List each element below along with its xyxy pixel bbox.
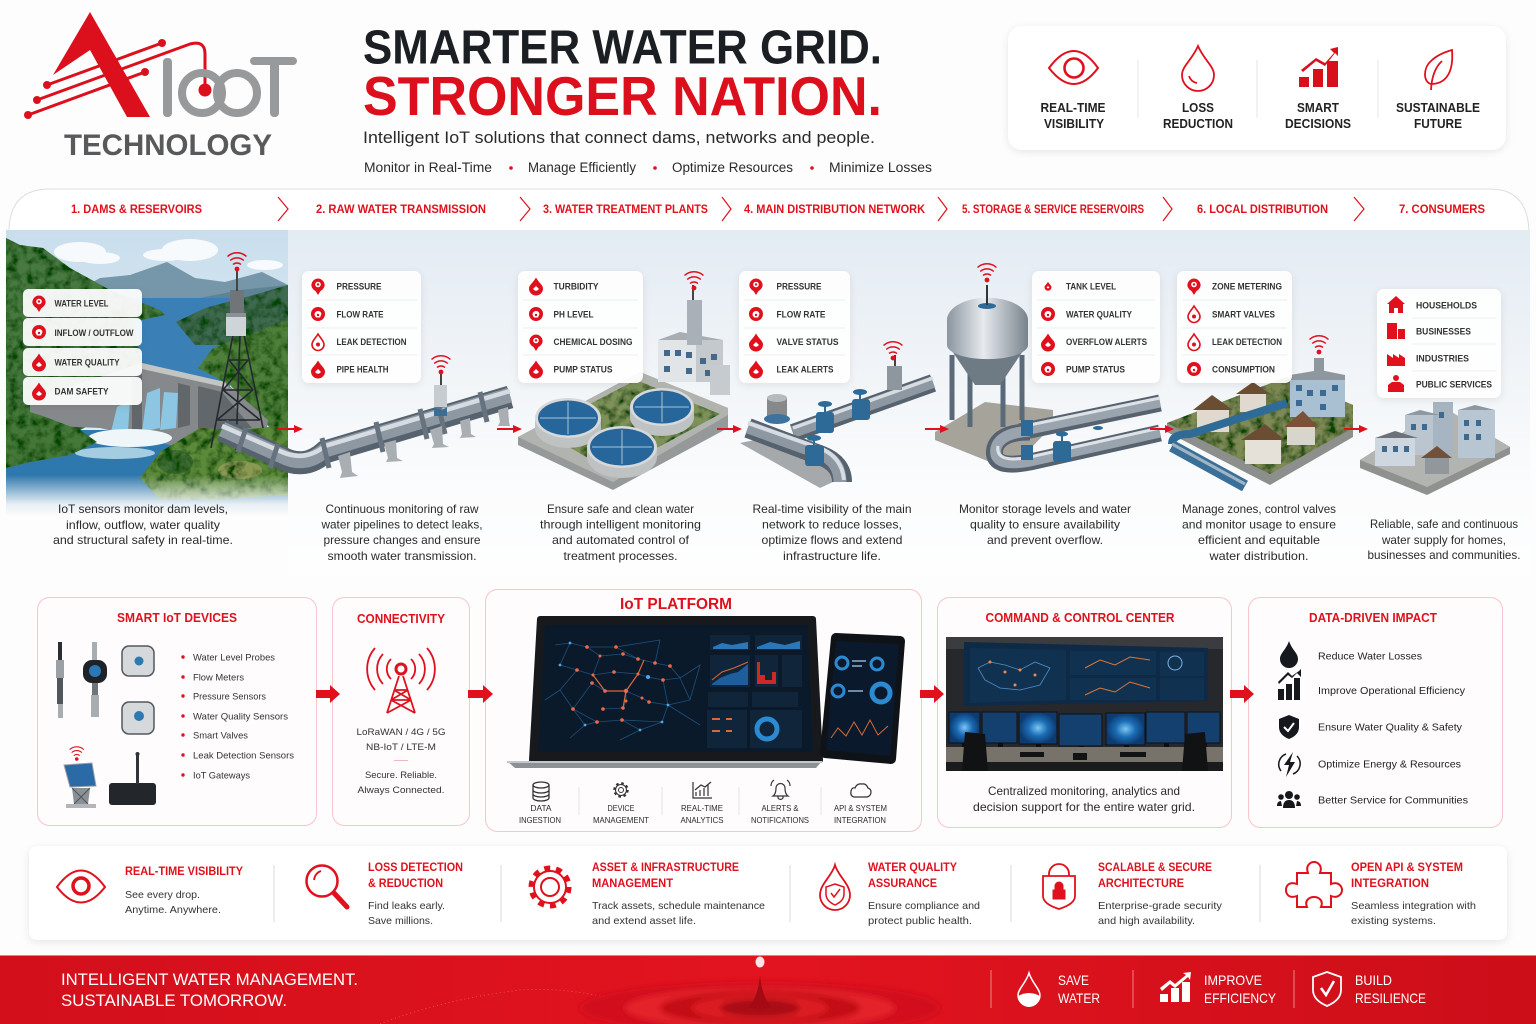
panel: water journey background	[9, 189, 1530, 575]
capability: asset management: ASSET & INFRASTRUCTURE	[592, 860, 739, 874]
capability: open API	[1286, 860, 1476, 927]
benefit label: real-time visibility: REAL-TIME	[1040, 101, 1106, 115]
connectivity protocols	[356, 727, 446, 753]
icon: eye	[1049, 51, 1098, 84]
capability: open API: Seamless integration with	[1351, 900, 1476, 912]
sensor card: local distribution: ZONE METERING	[1212, 282, 1282, 292]
icon: public services	[1388, 375, 1404, 392]
stage headers: 4. MAIN DISTRIBUTION NETWORK	[744, 204, 926, 216]
title: STRONGER NATION.	[363, 65, 882, 127]
sensor card: dam	[23, 289, 142, 405]
sensor card: local distribution	[1177, 271, 1292, 383]
benefit label: smart decisions: SMART	[1297, 101, 1339, 115]
heading: DATA-DRIVEN IMPACT	[1309, 610, 1437, 625]
illustration: main distribution pipes	[740, 342, 933, 488]
sensor card: treatment: CHEMICAL DOSING	[554, 337, 633, 347]
benefit label: loss reduction: REDUCTION	[1163, 117, 1233, 131]
laptop	[507, 619, 822, 768]
sensor card: consumers: BUSINESSES	[1416, 326, 1471, 336]
stage headers: 6. LOCAL DISTRIBUTION	[1197, 204, 1328, 216]
stage description: storage: Monitor storage levels and water	[959, 502, 1131, 516]
impact: efficiency: Improve Operational Efficiency	[1318, 686, 1466, 697]
illustration: local distribution neighbourhood	[1167, 336, 1353, 486]
panel: capabilities bar	[29, 846, 1507, 940]
connectivity note: Secure. Reliable.	[365, 770, 437, 781]
benefit label: real-time visibility	[1040, 101, 1106, 131]
caption	[973, 784, 1195, 814]
sensor card: main network: LEAK ALERTS	[776, 364, 834, 374]
icon: factory	[1387, 354, 1405, 366]
arrow: platform to command center	[920, 685, 944, 703]
sensor card: consumers: INDUSTRIES	[1416, 354, 1469, 364]
benefit label: smart decisions	[1285, 101, 1351, 131]
capability: loss detection: Save millions.	[368, 915, 433, 927]
feature: real-time analytics	[680, 782, 724, 825]
stage description: local distribution: Manage zones, control valves	[1182, 502, 1336, 516]
feature: alerts and notifications	[751, 780, 809, 825]
sensor card: storage: TANK LEVEL	[1066, 282, 1117, 292]
impact: water losses: Reduce Water Losses	[1318, 652, 1422, 662]
impact: water losses	[1280, 641, 1422, 668]
heading: COMMAND & CONTROL CENTER	[986, 610, 1175, 625]
illustration: storage reservoir	[935, 264, 1160, 470]
sensor card: dam: WATER QUALITY	[54, 358, 120, 368]
capability: real-time visibility: Anytime. Anywhere.	[125, 904, 221, 916]
feature: data ingestion: DATA	[530, 803, 552, 813]
stage description: dams	[53, 502, 233, 547]
logo: AIoT Technology	[24, 12, 297, 162]
capability: secure architecture: Enterprise-grade security	[1098, 900, 1223, 912]
sensor card: storage: OVERFLOW ALERTS	[1066, 337, 1147, 347]
stage description: dams: IoT sensors monitor dam levels,	[58, 502, 228, 516]
stage description: main network: Real-time visibility of the main	[752, 502, 912, 516]
feature: API and system integration: INTEGRATION	[834, 815, 886, 825]
sensor card: storage	[1032, 271, 1160, 383]
device list: Pressure Sensors	[193, 692, 266, 702]
caption: Centralized monitoring, analytics and	[988, 784, 1180, 798]
capability: water quality: WATER QUALITY	[868, 860, 957, 874]
sensor card: main network: FLOW RATE	[776, 310, 826, 320]
impact: energy	[1279, 752, 1461, 777]
sensor tower	[211, 253, 263, 450]
stage chevrons	[278, 197, 1364, 221]
capability: open API: existing systems.	[1351, 915, 1436, 927]
footer benefit: build resilience: RESILIENCE	[1355, 990, 1426, 1006]
sensor card: treatment: PUMP STATUS	[554, 364, 613, 374]
capability: loss detection: & REDUCTION	[368, 876, 443, 890]
device list	[181, 652, 294, 782]
value tagline: Manage Efficiently	[528, 160, 636, 175]
device list: Water Quality Sensors	[193, 712, 288, 722]
network map	[545, 640, 700, 740]
houses	[1193, 382, 1318, 464]
footer benefit: build resilience	[1313, 972, 1426, 1006]
feature: API and system integration: API & SYSTEM	[834, 803, 887, 813]
capability: secure architecture: SCALABLE & SECURE	[1098, 860, 1212, 874]
stage description: consumers: water supply for homes,	[1381, 533, 1506, 547]
stage description: treatment: and automated control of	[552, 533, 690, 547]
icon: leaf	[1425, 50, 1452, 90]
capability: loss detection: LOSS DETECTION	[368, 860, 463, 874]
sensor card: dam: WATER LEVEL	[54, 298, 109, 308]
sensor card: raw water: FLOW RATE	[336, 310, 384, 320]
footer benefit: save water: SAVE	[1058, 972, 1089, 988]
heading: CONNECTIVITY	[357, 611, 445, 626]
benefit label: sustainable future: SUSTAINABLE	[1396, 101, 1480, 115]
sensor card: storage: PUMP STATUS	[1066, 364, 1125, 374]
impact: communities: Better Service for Communities	[1318, 796, 1468, 806]
capability: loss detection: Find leaks early.	[368, 900, 445, 912]
stage headers: 5. STORAGE & SERVICE RESERVOIRS	[962, 204, 1144, 216]
benefit label: loss reduction: LOSS	[1182, 101, 1214, 115]
panel: top benefits	[1008, 26, 1506, 150]
stage headers: 2. RAW WATER TRANSMISSION	[316, 204, 486, 216]
stage description: consumers	[1368, 517, 1520, 562]
device list: Smart Valves	[193, 730, 248, 742]
sensor card: raw water: PRESSURE	[336, 282, 382, 292]
icon: growth chart	[1299, 47, 1338, 87]
stage description: storage: and prevent overflow.	[987, 533, 1103, 547]
stage headers: 7. CONSUMERS	[1399, 204, 1485, 216]
value tagline: Minimize Losses	[829, 160, 932, 175]
stage description: treatment: treatment processes.	[564, 549, 678, 563]
capability: secure architecture	[1043, 860, 1223, 927]
sensor card: dam: INFLOW / OUTFLOW	[54, 328, 134, 338]
capability: water quality: ASSURANCE	[868, 876, 937, 890]
sensor card: main network: PRESSURE	[776, 282, 822, 292]
sensor card: storage: WATER QUALITY	[1066, 310, 1132, 320]
footer tagline: INTELLIGENT WATER MANAGEMENT.	[61, 970, 358, 989]
sensor card: local distribution: CONSUMPTION	[1212, 364, 1275, 374]
blue valves	[805, 389, 870, 466]
stage description: dams: and structural safety in real-time.	[53, 533, 233, 547]
device list: Water Level Probes	[193, 652, 275, 664]
capability: water quality: protect public health.	[868, 915, 972, 927]
footer banner	[0, 955, 1536, 1024]
title	[363, 22, 882, 127]
stage description: local distribution: water distribution.	[1208, 549, 1308, 563]
sensor card: raw water	[302, 271, 421, 383]
stage description: storage	[959, 502, 1131, 547]
capability: asset management	[531, 860, 765, 927]
impact: quality and safety: Ensure Water Quality & Safety	[1318, 722, 1463, 734]
impact: communities	[1277, 791, 1468, 808]
device: sensor boxes	[122, 646, 154, 734]
storage pipes	[994, 398, 1160, 464]
sensor card: consumers	[1377, 289, 1501, 398]
capability: loss detection	[306, 860, 463, 927]
capability: secure architecture: ARCHITECTURE	[1098, 876, 1184, 890]
capability: real-time visibility: REAL-TIME VISIBILITY	[125, 864, 243, 878]
benefit label: loss reduction	[1163, 101, 1233, 131]
stage description: main network: infrastructure life.	[783, 549, 881, 563]
stage description: treatment	[540, 502, 701, 563]
stage description: local distribution: and monitor usage to ensure	[1182, 518, 1336, 532]
capability: asset management: Track assets, schedule maintenance	[592, 900, 765, 912]
connectivity note: Always Connected.	[358, 785, 444, 796]
caption: decision support for the entire water grid.	[973, 800, 1195, 814]
pipe supports	[338, 407, 510, 478]
title: SMARTER WATER GRID.	[363, 22, 882, 74]
logo: AIoT Technology: TECHNOLOGY	[64, 129, 272, 162]
stage headers: 1. DAMS & RESERVOIRS	[71, 204, 202, 216]
footer tagline: SUSTAINABLE TOMORROW.	[61, 991, 287, 1010]
stage description: raw water: Continuous monitoring of raw	[326, 502, 479, 516]
sensor card: main network	[739, 271, 850, 383]
panel: command and control center	[938, 598, 1232, 828]
panel: data-driven impact	[1248, 598, 1502, 828]
feature: data ingestion: INGESTION	[519, 815, 561, 825]
capability: secure architecture: and high availability.	[1098, 915, 1195, 927]
sensor card: treatment: PH LEVEL	[554, 310, 594, 320]
benefit label: sustainable future	[1396, 101, 1480, 131]
heading: IoT PLATFORM	[620, 596, 732, 613]
illustration: pipeline sensor	[432, 356, 450, 416]
heading: SMART IoT DEVICES	[117, 610, 237, 625]
feature: API and system integration	[834, 784, 887, 825]
capability: water quality	[820, 860, 980, 927]
stage description: consumers: businesses and communities.	[1368, 548, 1520, 562]
arrow: devices to connectivity	[316, 685, 340, 703]
stage description: raw water: water pipelines to detect leaks,	[321, 518, 482, 532]
panel: IoT platform	[486, 590, 922, 832]
stage description: local distribution: efficient and equitable	[1198, 533, 1320, 547]
icon: drop	[1182, 46, 1214, 91]
panel: smart IoT devices	[38, 598, 316, 826]
value tagline: Optimize Resources	[672, 160, 793, 175]
device: gateway	[109, 752, 156, 805]
benefit label: smart decisions: DECISIONS	[1285, 117, 1351, 131]
illustration: dam and reservoir	[0, 230, 510, 520]
sensor card: raw water: PIPE HEALTH	[336, 364, 388, 374]
dashboard widgets	[707, 635, 802, 748]
stage description: main network	[752, 502, 912, 563]
stage headers: 3. WATER TREATMENT PLANTS	[543, 204, 708, 216]
stage description: raw water: pressure changes and ensure	[324, 533, 481, 547]
icon: office	[1387, 323, 1405, 339]
capability: real-time visibility: See every drop.	[125, 889, 200, 901]
footer benefit: improve efficiency: EFFICIENCY	[1204, 990, 1277, 1006]
phone	[825, 638, 900, 759]
stage description: main network: optimize flows and extend	[762, 533, 902, 547]
stage description: treatment: Ensure safe and clean water	[547, 502, 694, 516]
flow arrows between stages	[278, 425, 1368, 433]
sensor card: local distribution: SMART VALVES	[1212, 310, 1275, 320]
stage description: treatment: through intelligent monitoring	[540, 518, 701, 532]
connectivity note	[358, 770, 444, 796]
sensor card: local distribution: LEAK DETECTION	[1212, 337, 1282, 347]
footer benefit: improve efficiency	[1160, 972, 1277, 1006]
stage headers	[71, 204, 1485, 216]
sensor card: dam: DAM SAFETY	[54, 386, 109, 396]
sensor card: treatment: TURBIDITY	[554, 282, 599, 292]
device list: IoT Gateways	[193, 770, 250, 782]
arrow: command center to impact	[1230, 685, 1254, 703]
capability: water quality: Ensure compliance and	[868, 900, 980, 912]
impact: efficiency	[1278, 669, 1466, 700]
stage description: dams: inflow, outflow, water quality	[66, 518, 220, 532]
icon: radio tower	[367, 648, 435, 713]
arrow: connectivity to platform	[468, 685, 493, 703]
device: probes	[56, 642, 107, 718]
feature: alerts and notifications: ALERTS &	[762, 803, 799, 813]
footer benefit: save water: WATER	[1058, 990, 1100, 1006]
feature: real-time analytics: REAL-TIME	[681, 803, 723, 813]
stage description: storage: quality to ensure availability	[970, 518, 1120, 532]
feature: real-time analytics: ANALYTICS	[680, 815, 724, 825]
sensor card: raw water: LEAK DETECTION	[336, 337, 406, 347]
device list: Leak Detection Sensors	[193, 750, 294, 762]
stage description: local distribution	[1182, 502, 1336, 563]
capability: open API: INTEGRATION	[1351, 876, 1429, 890]
impact: quality and safety	[1279, 715, 1463, 739]
feature: device management: MANAGEMENT	[593, 815, 649, 825]
impact: energy: Optimize Energy & Resources	[1318, 760, 1461, 770]
water ripple	[580, 956, 940, 1024]
connectivity protocols: NB-IoT / LTE-M	[366, 742, 436, 753]
footer benefit: improve efficiency: IMPROVE	[1204, 972, 1262, 988]
stage description: main network: network to reduce losses,	[762, 518, 902, 532]
panel: connectivity	[332, 598, 470, 826]
footer benefit: build resilience: BUILD	[1355, 972, 1392, 988]
icon: house	[1387, 296, 1405, 313]
feature: alerts and notifications: NOTIFICATIONS	[751, 815, 809, 825]
value tagline: Monitor in Real-Time	[364, 160, 492, 175]
benefit label: real-time visibility: VISIBILITY	[1044, 117, 1105, 131]
illustration: water treatment plant	[518, 272, 730, 490]
treatment tanks	[535, 388, 694, 478]
sensor card: consumers: PUBLIC SERVICES	[1416, 380, 1492, 390]
benefit label: sustainable future: FUTURE	[1414, 117, 1462, 131]
stage description: consumers: Reliable, safe and continuous	[1370, 517, 1518, 531]
capability: open API: OPEN API & SYSTEM	[1351, 860, 1463, 874]
footer benefit: save water	[1018, 972, 1100, 1007]
control room image	[946, 637, 1223, 771]
subtitle: Intelligent IoT solutions that connect dams, networks and people.	[363, 128, 875, 147]
sensor card: treatment	[518, 271, 643, 383]
footer tagline	[61, 970, 358, 1010]
feature: device management	[593, 784, 649, 825]
value tagline	[364, 160, 932, 175]
connectivity protocols: LoRaWAN / 4G / 5G	[356, 727, 446, 738]
feature: device management: DEVICE	[608, 803, 635, 813]
feature: data ingestion	[519, 782, 561, 825]
capability: asset management: MANAGEMENT	[592, 876, 674, 890]
sensor card: main network: VALVE STATUS	[776, 337, 839, 347]
capability: real-time visibility	[57, 864, 243, 916]
device list: Flow Meters	[193, 672, 244, 684]
capability: asset management: and extend asset life.	[592, 915, 696, 927]
pipe from dam	[222, 391, 510, 468]
stage description: raw water	[321, 502, 482, 563]
illustration: consumer city block	[1360, 402, 1510, 495]
sensor card: consumers: HOUSEHOLDS	[1416, 300, 1477, 310]
stage description: raw water: smooth water transmission.	[328, 549, 476, 563]
blue distribution pipes	[1172, 403, 1287, 486]
device: solar sensor	[64, 747, 96, 808]
